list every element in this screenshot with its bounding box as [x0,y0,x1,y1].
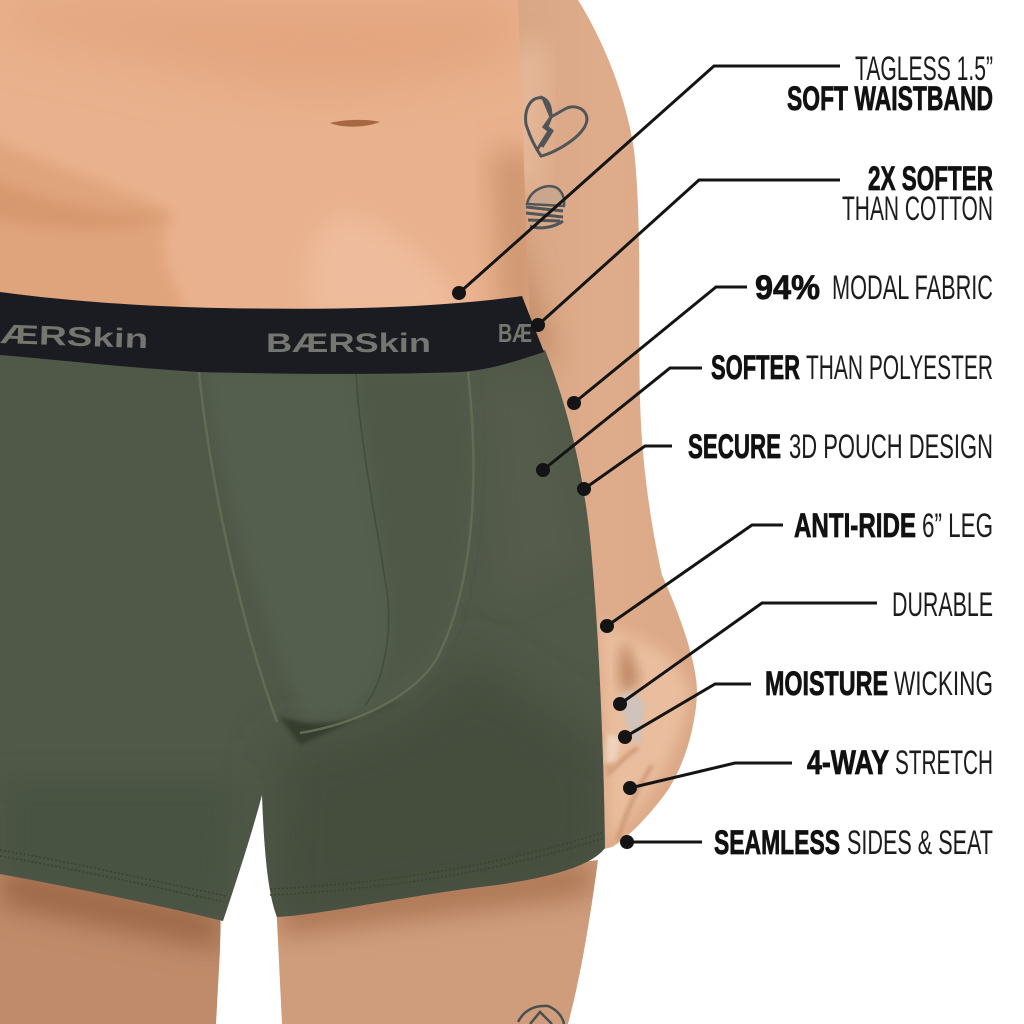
waistband logo center: BÆRSkin [266,328,431,358]
hand folds [606,735,652,840]
callout: secure pouch [577,428,993,496]
callout: softer than polyester [536,349,993,477]
callout: anti-ride leg [600,507,993,633]
callout: modal fabric: 94% [755,269,820,307]
callout: seamless sides and seat: SEAMLESS [714,824,840,862]
lower leg tattoo [518,1006,564,1024]
callout: durable [613,586,993,711]
callout: anti-ride leg: ANTI-RIDE [794,507,916,545]
arm and hand [505,0,697,850]
callout: softer than polyester: SOFTER [711,349,800,387]
seams [199,372,277,722]
callout: modal fabric [567,269,993,410]
callout: tagless waistband [452,50,993,300]
legs [0,860,610,1024]
callout: moisture wicking: MOISTURE [765,665,888,703]
thumbnail [606,733,620,765]
callout: softer than cotton [531,160,993,332]
shorts [0,350,610,930]
navel [330,120,380,127]
waistband logo left: ÆRSkin [0,319,149,354]
callout: 4-way stretch [623,744,993,795]
callout: secure pouch: SECURE [688,428,781,466]
soft shading [251,682,605,917]
callout: seamless sides and seat [620,824,993,862]
finger gap [620,692,645,745]
tattoo: broken heart [526,98,587,156]
waistband [0,292,544,374]
torso [0,0,540,330]
tattoo: burger [526,186,564,228]
callout: 4-way stretch: 4-WAY [807,744,889,782]
waistband logo right: BÆ [498,318,532,348]
callout: moisture wicking [618,665,993,744]
